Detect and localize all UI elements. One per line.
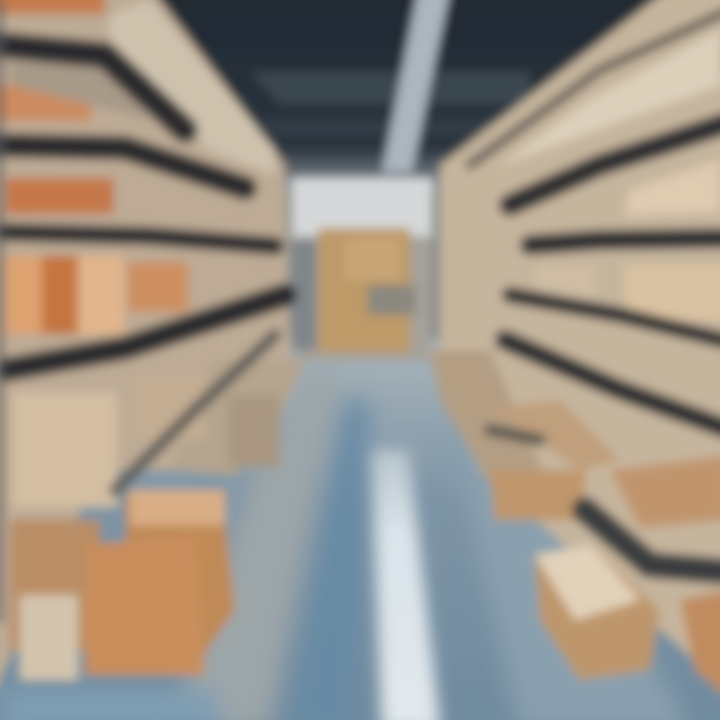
right shelving	[430, 0, 720, 700]
floor light strip	[372, 450, 440, 720]
left boxes	[0, 0, 275, 507]
ceiling	[0, 0, 720, 190]
left shelving	[0, 0, 305, 720]
far end of aisle	[292, 178, 432, 361]
right shelves	[470, 10, 720, 572]
right floor cartons	[535, 545, 720, 700]
right boxes	[480, 30, 720, 528]
left shelves	[0, 0, 285, 620]
floor	[0, 340, 720, 720]
left floor cartons	[10, 395, 280, 680]
